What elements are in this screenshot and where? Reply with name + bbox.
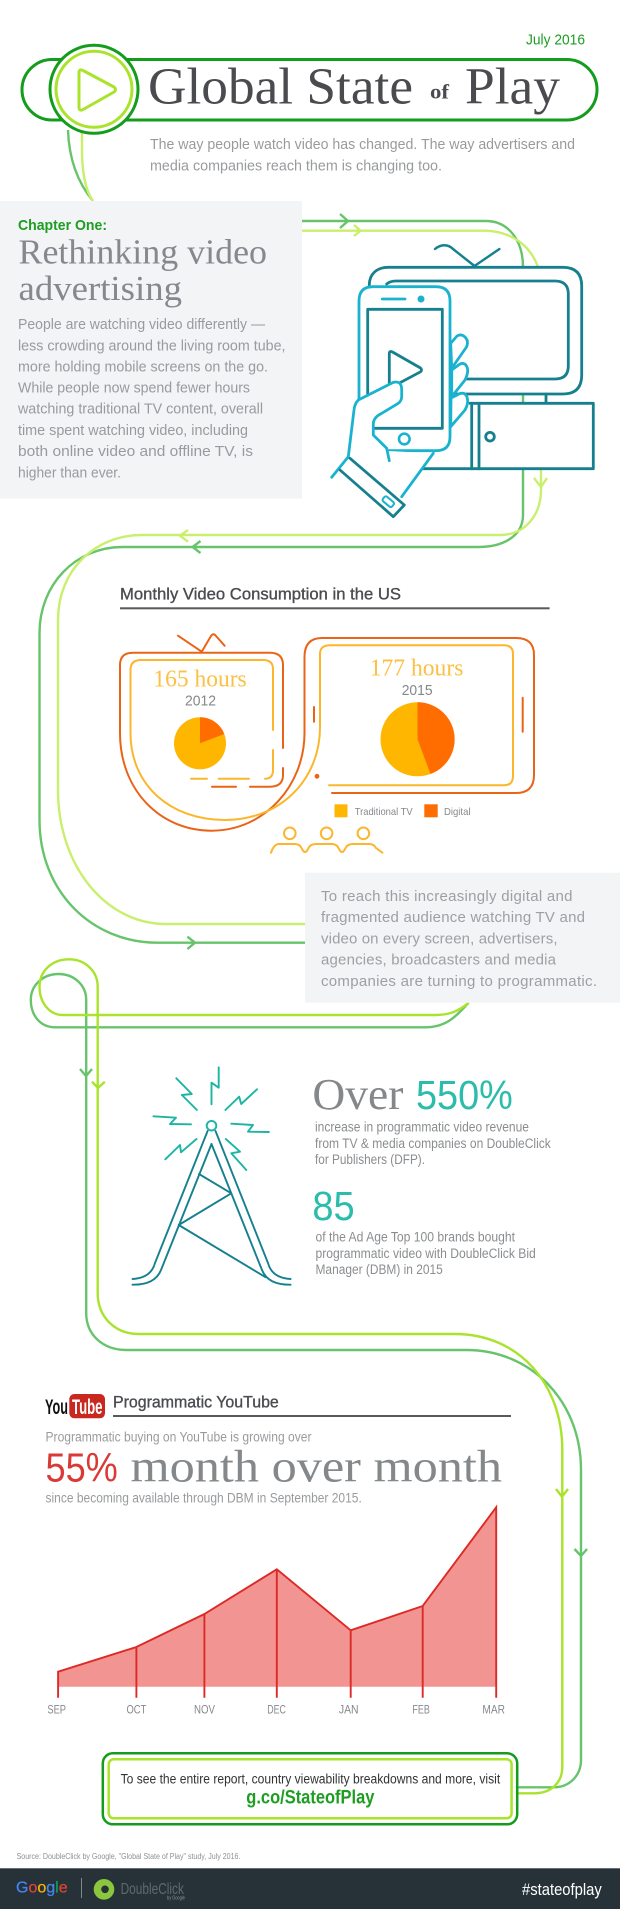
footer bar [0, 1868, 620, 1909]
cabinet [423, 403, 593, 469]
chapter heading: Rethinking video [18, 232, 267, 272]
icon: tv and tablet outlines [120, 634, 534, 831]
phone [359, 287, 450, 451]
flow line: mid green path [31, 130, 587, 1787]
2012 figures: 165 hours [153, 667, 247, 693]
icon: youtube logo: Tube [72, 1396, 102, 1419]
month labels: MAR [482, 1702, 505, 1716]
hashtag: #stateofplay [522, 1880, 602, 1899]
title banner [22, 45, 597, 133]
month labels: FEB [412, 1702, 430, 1716]
stat: 85 brands [312, 1183, 536, 1277]
flow line: bright lime path [40, 959, 568, 1793]
month labels: OCT [126, 1702, 147, 1716]
panel: programmatic text: video on every screen, advertisers, [321, 930, 558, 947]
month labels: NOV [194, 1702, 215, 1716]
date label: July 2016 [526, 32, 585, 48]
stat: over 550%: from TV & media companies on DoubleClick [315, 1136, 551, 1151]
heading: programmatic youtube: Programmatic YouTube [113, 1393, 279, 1411]
panel: programmatic text: companies are turning to programmatic. [321, 973, 597, 990]
doubleclick logo [94, 1879, 185, 1902]
signal bolts [153, 1067, 269, 1170]
chapter body text: watching traditional TV content, overall [17, 402, 263, 418]
legend: Digital [444, 806, 470, 818]
pie chart 2015 [380, 702, 455, 776]
shirt cuff [340, 458, 404, 517]
flow line: lime path [58, 133, 547, 924]
2015 figures [370, 656, 463, 699]
heading: monthly video consumption: Monthly Video Consumption in the US [120, 586, 401, 604]
chapter body text: While people now spend fewer hours [18, 381, 250, 397]
title text: Global State [148, 58, 413, 116]
tv set [369, 245, 582, 404]
legend [334, 804, 470, 818]
month labels [47, 1702, 505, 1716]
icon: youtube logo [45, 1394, 105, 1419]
youtube growth statement: 55% [46, 1445, 118, 1491]
panel: programmatic text [305, 873, 620, 1003]
month labels: DEC [267, 1702, 286, 1716]
youtube growth statement: Programmatic buying on YouTube is growing over [46, 1430, 312, 1445]
google logo: Google [16, 1880, 68, 1897]
stat: 85 brands: programmatic video with DoubleClick Bid [316, 1246, 536, 1261]
chapter body text: both online video and offline TV, is [18, 444, 253, 460]
callout: see the report: To see the entire report, country viewability breakdowns and more, visit [121, 1771, 500, 1786]
2012 figures: 2012 [185, 693, 216, 710]
youtube growth statement [46, 1430, 502, 1506]
stat: 85 brands: Manager (DBM) in 2015 [316, 1262, 443, 1277]
stat: over 550%: increase in programmatic video revenue [315, 1120, 529, 1135]
title text: Play [465, 58, 560, 116]
stat: 85 brands: 85 [312, 1183, 355, 1229]
area chart: youtube growth [47, 1507, 505, 1716]
source note: Source: DoubleClick by Google, "Global State of Play" study, July 2016. [17, 1852, 240, 1861]
2015 figures: 2015 [402, 682, 433, 699]
chapter body text: time spent watching video, including [18, 423, 248, 439]
doubleclick logo: by Google [167, 1896, 185, 1902]
icon: broadcast tower [132, 1067, 291, 1285]
banner pill [22, 60, 597, 120]
stat: over 550% [312, 1070, 551, 1167]
2015 figures: 177 hours [370, 656, 463, 682]
callout: see the report: g.co/StateofPlay [246, 1787, 375, 1808]
chapter body text: less crowding around the living room tube, [18, 338, 286, 354]
title text: of [430, 80, 450, 104]
youtube growth statement: month over month [130, 1442, 502, 1492]
intro text: media companies reach them is changing too. [150, 158, 442, 174]
callout: see the report [103, 1753, 517, 1824]
hand [332, 335, 468, 497]
panel: chapter one [0, 201, 302, 498]
icon: play button [50, 45, 138, 133]
month labels: JAN [339, 1702, 359, 1716]
chapter body text: People are watching video differently — [18, 317, 265, 333]
chart: monthly video consumption tv and tablet [120, 634, 534, 853]
chapter heading [18, 232, 267, 308]
illustration: tv, cabinet, phone and hand [332, 245, 593, 517]
intro text [150, 136, 575, 174]
tower structure [132, 1131, 291, 1285]
youtube growth statement: since becoming available through DBM in September 2015. [46, 1491, 362, 1506]
month labels: SEP [47, 1702, 66, 1716]
stat: over 550%: 550% [416, 1072, 513, 1118]
2012 figures [153, 667, 247, 710]
legend: Traditional TV [355, 806, 413, 818]
intro text: The way people watch video has changed. The way advertisers and [150, 136, 575, 153]
panel: programmatic text: To reach this increasingly digital and [321, 888, 572, 905]
chapter body text [17, 317, 286, 481]
chapter body text: higher than ever. [18, 465, 121, 481]
chapter label: Chapter One: [18, 217, 107, 234]
panel: programmatic text: agencies, broadcasters and media [321, 952, 557, 969]
stat: over 550%: for Publishers (DFP). [315, 1152, 425, 1167]
panel: programmatic text: fragmented audience watching TV and [321, 909, 585, 926]
icon: youtube logo: You [45, 1396, 68, 1419]
stat: 85 brands: of the Ad Age Top 100 brands bought [316, 1230, 515, 1245]
icon: audience [271, 828, 382, 853]
pie chart 2012 [174, 717, 226, 769]
chapter body text: more holding mobile screens on the go. [18, 359, 268, 375]
doubleclick logo: DoubleClick [121, 1881, 185, 1898]
stat: over 550%: Over [312, 1070, 404, 1119]
title text [148, 58, 560, 116]
chapter heading: advertising [18, 269, 182, 308]
